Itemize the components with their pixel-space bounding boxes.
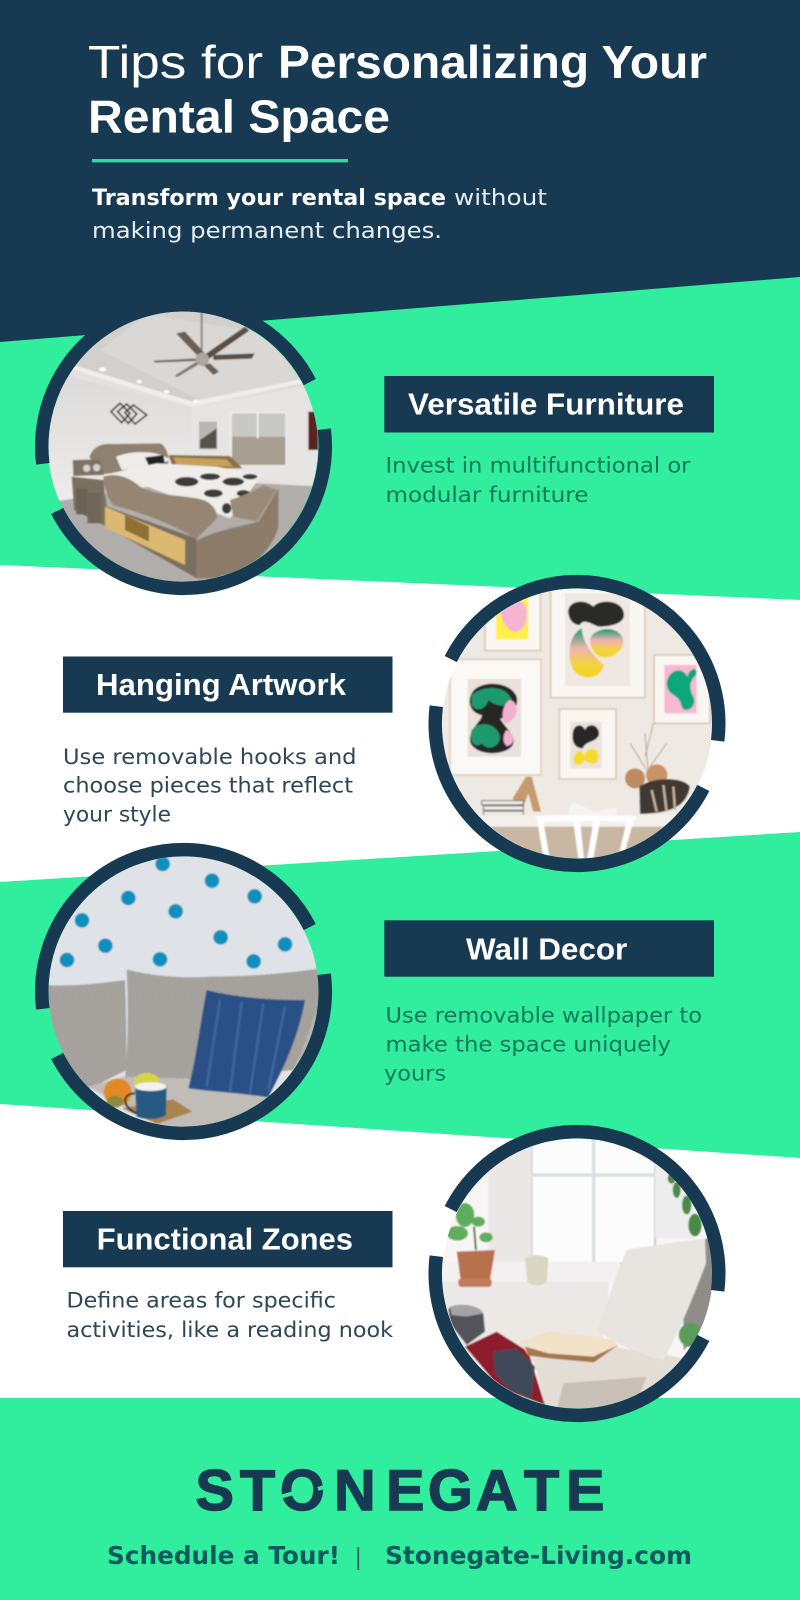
footer call to action	[107, 1541, 692, 1570]
title: Personalizing Your	[278, 36, 707, 88]
text: Hanging Artwork description: your style	[63, 803, 171, 827]
title: Rental Space	[88, 91, 390, 143]
text: Hanging Artwork description: choose pieces that reflect	[63, 774, 353, 798]
text: Versatile Furniture description: Invest in multifunctional or	[386, 454, 691, 478]
ring: furniture photo	[42, 305, 325, 588]
subtitle	[92, 185, 547, 244]
ring: wall decor photo	[42, 850, 325, 1133]
subtitle: without	[454, 185, 547, 211]
subtitle: Transform your rental space	[92, 185, 446, 211]
heading box: Versatile Furniture: Versatile Furniture	[408, 387, 684, 422]
header panel	[0, 0, 800, 342]
text: Wall Decor description: yours	[384, 1062, 446, 1086]
heading box: Wall Decor: Wall Decor	[466, 932, 627, 967]
photo: gallery wall of hanging artwork	[440, 587, 717, 863]
logo: Stonegate wordmark: STONEGATE	[196, 1459, 604, 1523]
heading box: Hanging Artwork	[63, 656, 392, 713]
subtitle: making permanent changes.	[92, 218, 442, 244]
ring: artwork photo	[435, 582, 719, 865]
text: Versatile Furniture description: modular furniture	[386, 483, 588, 507]
text: Wall Decor description	[384, 1003, 702, 1086]
title underline	[92, 159, 348, 162]
text: Wall Decor description: Use removable wallpaper to	[386, 1003, 702, 1027]
heading box: Versatile Furniture	[384, 376, 714, 432]
text: Hanging Artwork description: Use removable hooks and	[63, 745, 356, 769]
footer call to action: Schedule a Tour!	[107, 1541, 340, 1570]
title	[88, 36, 707, 143]
text: Hanging Artwork description	[63, 745, 356, 827]
photo: polka dot wall decals above a sofa	[43, 850, 323, 1130]
heading box: Functional Zones	[63, 1211, 392, 1267]
photo: bedroom with versatile furniture	[43, 307, 323, 587]
text: Functional Zones description: activities, like a reading nook	[66, 1318, 394, 1342]
text: Functional Zones description: Define areas for specific	[66, 1289, 336, 1313]
title: Tips for	[88, 36, 263, 88]
heading box: Functional Zones: Functional Zones	[97, 1222, 353, 1257]
text: Wall Decor description: make the space uniquely	[386, 1033, 671, 1057]
footer call to action: Stonegate-Living.com	[385, 1541, 692, 1570]
heading box: Hanging Artwork: Hanging Artwork	[96, 667, 347, 702]
photo: window seat reading nook	[440, 1137, 717, 1413]
heading box: Wall Decor	[384, 920, 714, 977]
text: Functional Zones description	[66, 1289, 394, 1342]
ring: functional zones photo	[435, 1132, 719, 1415]
text: Versatile Furniture description	[386, 454, 691, 507]
